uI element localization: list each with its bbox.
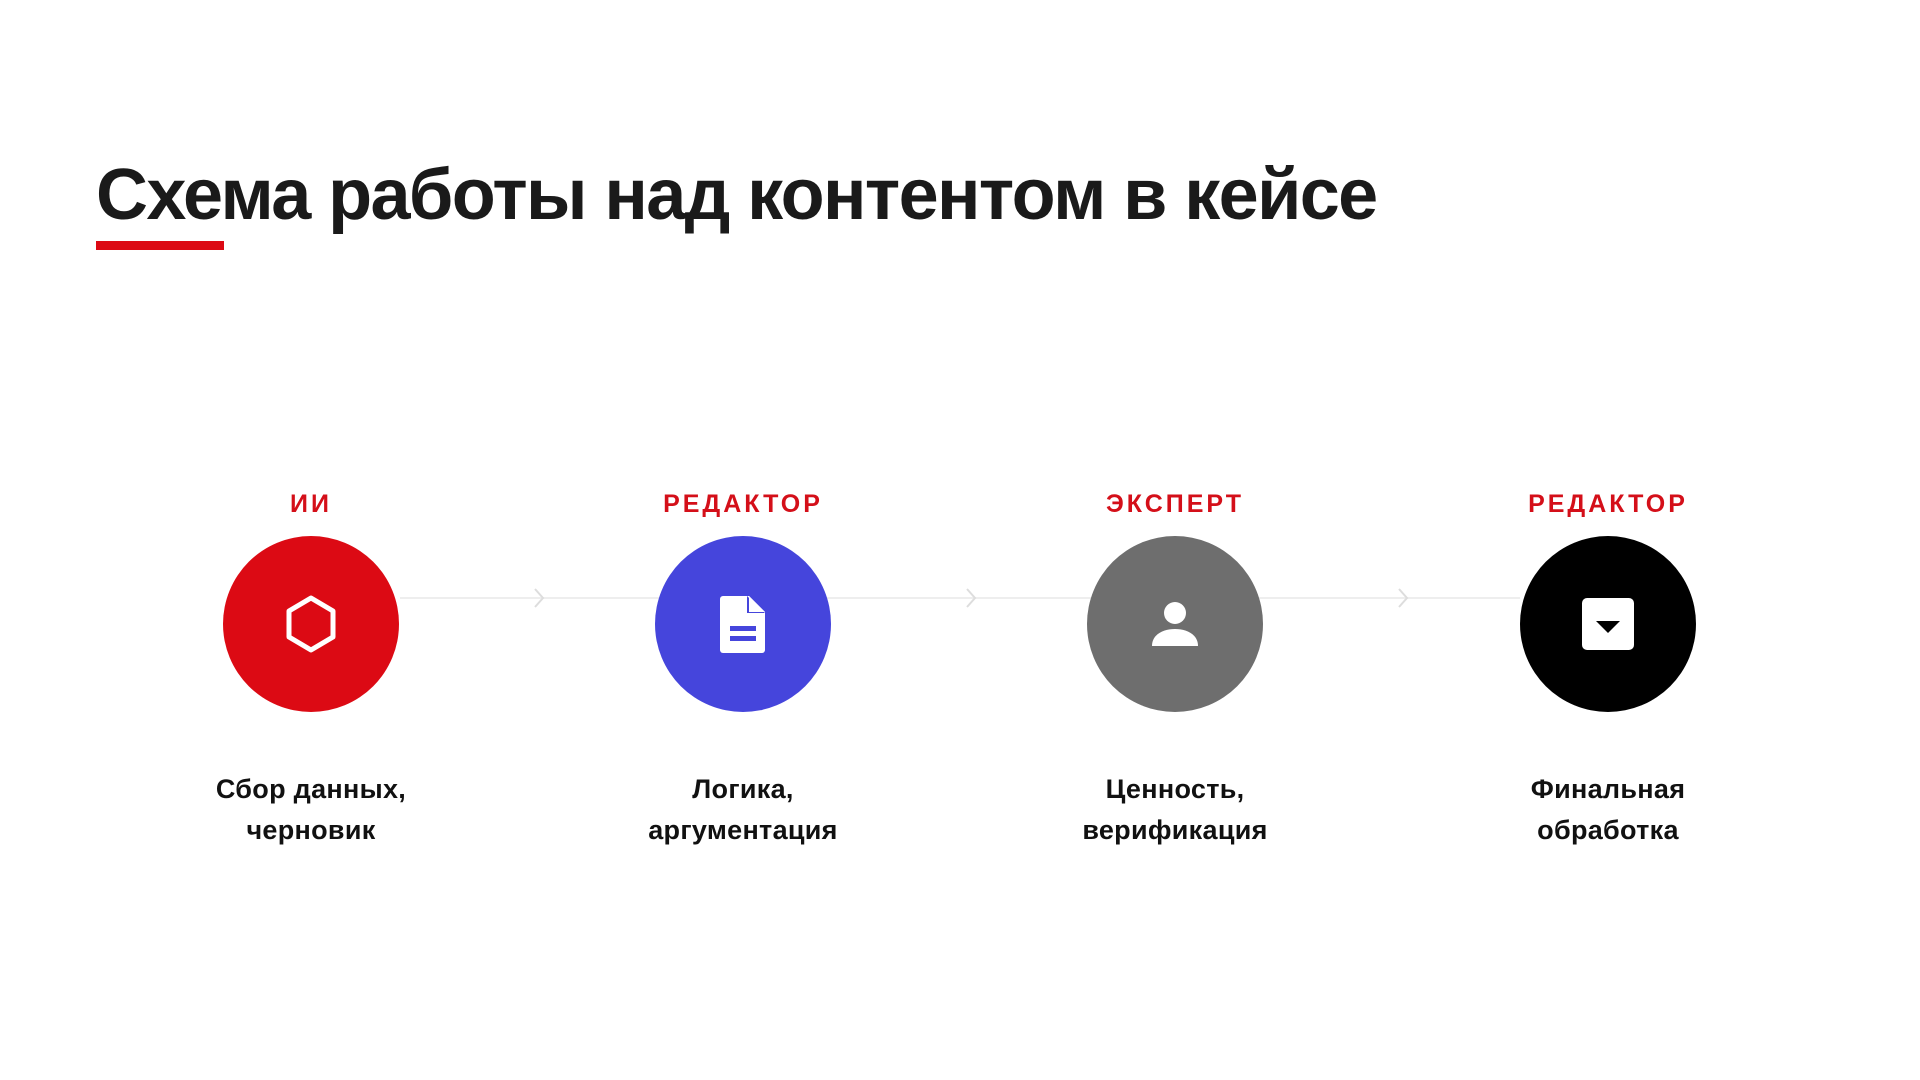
step 4: editor	[1520, 490, 1696, 845]
step 2: editor	[648, 490, 838, 845]
step 3: expert: ЭКСПЕРТ	[1106, 490, 1244, 518]
step 4: editor: РЕДАКТОР	[1528, 490, 1688, 518]
step 3: expert: Ценность,	[1106, 774, 1244, 804]
step 1: AI: Сбор данных,	[216, 774, 406, 804]
step 4: editor: обработка	[1537, 815, 1679, 845]
title: Схема работы над контентом в кейсе	[96, 155, 1377, 235]
step 3: expert: верификация	[1082, 815, 1268, 845]
step 2: editor: РЕДАКТОР	[663, 490, 823, 518]
step 4: editor: Финальная	[1531, 774, 1685, 804]
step 1: AI	[216, 490, 406, 845]
title underline	[96, 241, 224, 250]
step 2: editor: Логика,	[692, 774, 794, 804]
icon: archive box	[1520, 536, 1696, 712]
step 2: editor: аргументация	[648, 815, 838, 845]
step 1: AI: черновик	[246, 815, 376, 845]
icon: document	[655, 536, 831, 712]
step 1: AI: ИИ	[290, 490, 332, 518]
step 3: expert	[1082, 490, 1268, 845]
icon: hexagon	[223, 536, 399, 712]
icon: person	[1087, 536, 1263, 712]
